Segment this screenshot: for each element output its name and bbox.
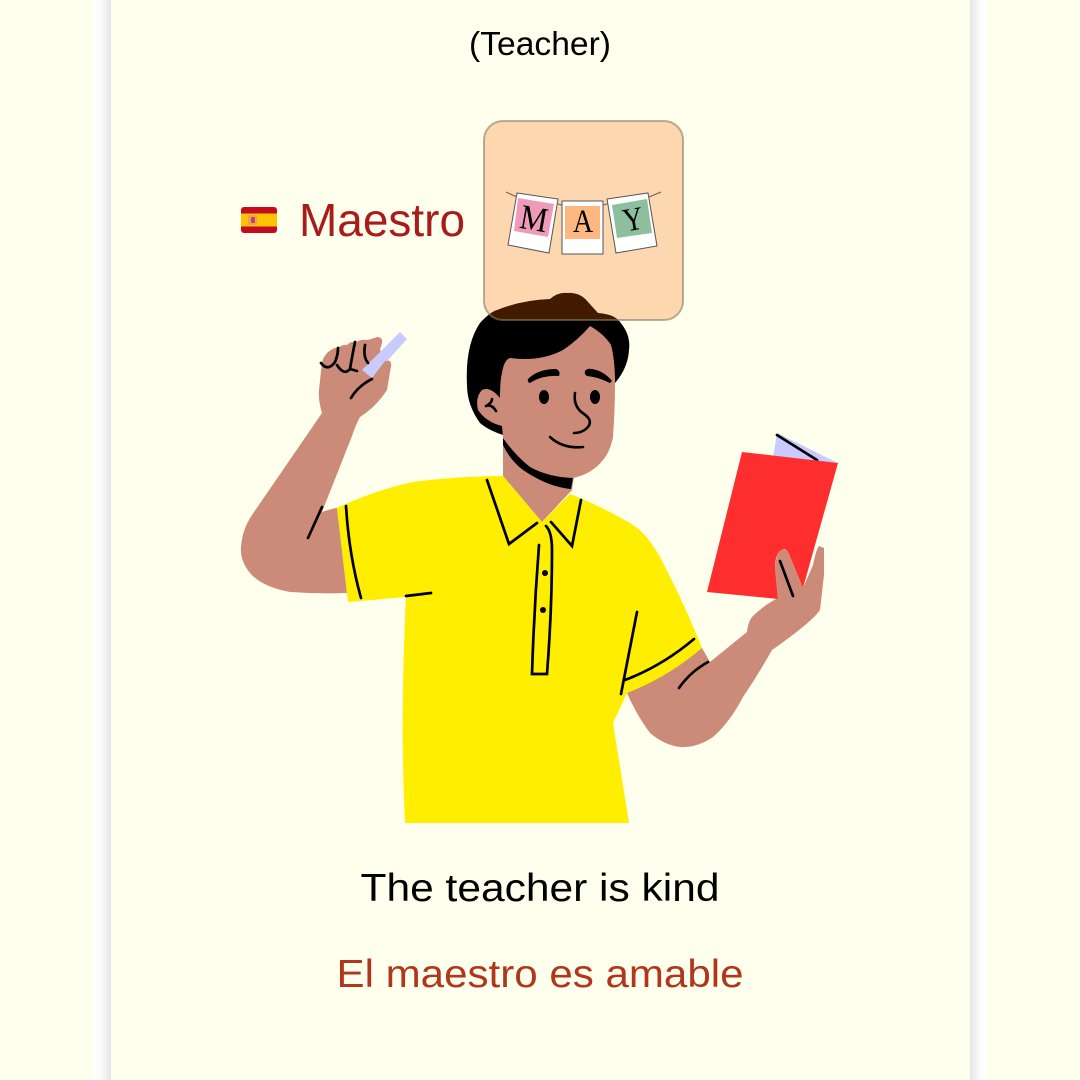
hair — [467, 293, 629, 435]
photo Y: Y — [620, 200, 646, 239]
text: Spanish sentence: El maestro es amable — [336, 953, 744, 996]
photo A: A — [573, 203, 593, 240]
hand lines — [308, 342, 372, 538]
thumb over chalk — [372, 361, 391, 395]
finger line — [780, 561, 793, 596]
icon: Spanish flag — [241, 207, 277, 233]
photo M — [508, 193, 558, 253]
shirt — [337, 476, 702, 823]
illustration: teacher — [241, 293, 838, 823]
heading: English word: (Teacher) — [469, 25, 611, 62]
neck — [503, 425, 575, 522]
panel: card — [111, 0, 970, 1080]
panel: May photo banner — [484, 121, 683, 320]
neck shadow — [503, 438, 573, 489]
shirt lines — [346, 480, 708, 694]
eyebrows — [528, 369, 560, 383]
book page — [773, 433, 838, 463]
chalk — [362, 332, 407, 378]
string — [506, 192, 661, 205]
right arm and hand — [627, 546, 824, 747]
shirt buttons — [542, 570, 548, 576]
nose, smile and ear lines — [486, 393, 590, 447]
face — [477, 326, 615, 478]
photo A — [562, 201, 603, 254]
left arm and hand — [241, 337, 391, 593]
text: English sentence: The teacher is kind — [360, 867, 720, 910]
photo M: M — [517, 198, 551, 241]
eyes — [539, 390, 549, 404]
red book — [707, 452, 838, 599]
photo Y — [607, 193, 657, 253]
tinted square — [484, 121, 683, 320]
heading: Spanish word: Maestro — [299, 194, 465, 246]
